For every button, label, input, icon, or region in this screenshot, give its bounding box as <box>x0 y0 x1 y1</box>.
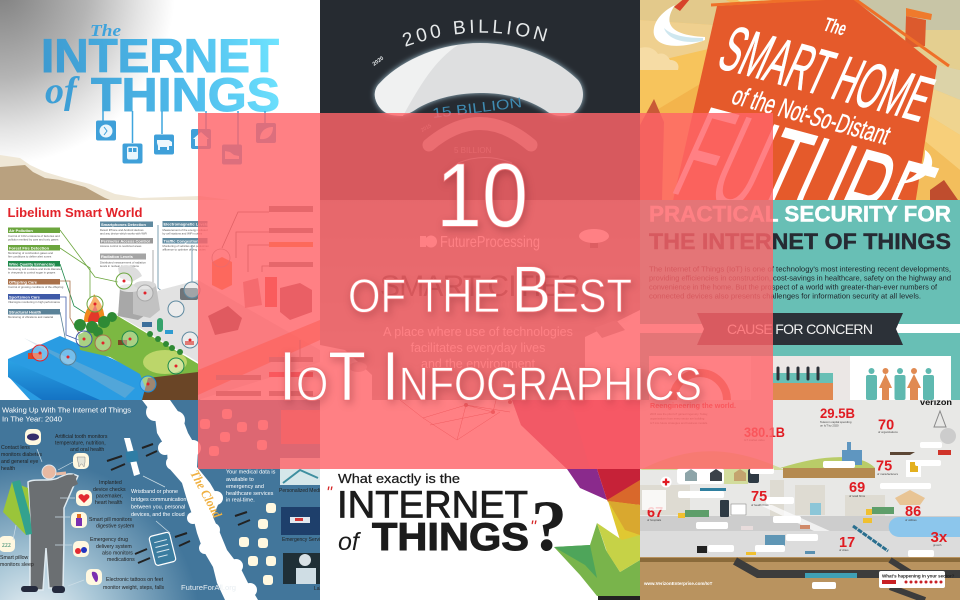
heading: Reengineering the world: Reengineering the world. <box>650 403 736 410</box>
labels: body sensors: Artificial tooth monitors <box>55 434 108 440</box>
labels: body sensors: and oral health <box>70 447 104 453</box>
brown soil edge <box>142 372 198 400</box>
large glowing arc <box>375 43 583 116</box>
icon: smart pill <box>71 512 87 528</box>
callout: what's happening in your sector <box>879 571 955 588</box>
heading: The Internet of Things <box>44 24 279 112</box>
heading: Reengineering the world: IoT into future strategies and business models. <box>650 421 708 425</box>
panel: What exactly is the Internet of Things <box>320 400 640 600</box>
icon: train <box>122 144 142 164</box>
labels: body sensors: also monitors <box>102 550 133 556</box>
hospital building <box>642 490 666 510</box>
sensor labels: left column <box>8 228 64 319</box>
label: bridge text: between you, personal <box>131 504 185 510</box>
sensor labels: left column: Offspring Care <box>9 280 38 284</box>
labels: body sensors <box>0 434 165 591</box>
sensor labels: centre columns: Electromagnetic Levels <box>164 222 209 226</box>
icon: drug delivery <box>73 541 89 557</box>
banner: Cause for Concern <box>697 313 903 345</box>
labels: body sensors: Smart pillow <box>0 555 29 561</box>
heading: The Internet of Things: The <box>90 21 122 40</box>
neighbourhood strip <box>677 468 759 484</box>
icon: eye <box>25 429 41 445</box>
caption: lab: Lab <box>314 586 323 592</box>
labels: body sensors: digestive system <box>96 524 134 530</box>
city section: connector lines <box>222 212 300 357</box>
torn paper and sand <box>0 155 198 200</box>
heading: The Internet of Things: THE INTERNET OF THINGS <box>649 229 951 254</box>
low poly head: upper <box>512 400 640 505</box>
sensor labels: left column: fire conditions to define alert zones <box>8 254 52 258</box>
label: 5 billion: 5 BILLION <box>454 146 492 155</box>
cloud <box>640 47 679 70</box>
main title <box>279 146 702 415</box>
grey road plate <box>116 280 320 400</box>
city section: orange tower <box>212 249 232 290</box>
labels: body sensors: delivery system <box>96 544 132 550</box>
heading: Reengineering the world <box>650 403 736 425</box>
stat captions: Telecom capital spending <box>820 420 852 424</box>
sensor labels: left column: Forest Fire Detection <box>9 246 50 250</box>
translucent red overlay panel <box>198 113 773 469</box>
label: FutureForAll.org: FutureForAll.org <box>181 585 236 592</box>
icon: leaf <box>256 123 276 143</box>
labels: body sensors: pacemaker, <box>96 494 123 500</box>
red stat numbers: 3x <box>930 529 948 546</box>
sensor labels: left column: Structural Health <box>9 310 42 314</box>
sensor labels: left column: Monitoring of vibrations and material <box>8 315 53 319</box>
icon: red cross <box>660 476 672 488</box>
arrows: data flow <box>107 444 250 563</box>
landscape: green hills <box>640 451 875 470</box>
low poly head: green <box>554 523 640 600</box>
quote mark: open: " <box>326 483 333 502</box>
arc label: 15 Billion: 15 BILLION <box>431 94 523 121</box>
label: 2015: 2015 <box>420 123 433 134</box>
man in pajamas <box>21 465 78 593</box>
isometric water block <box>8 336 200 400</box>
stat captions: of cities <box>839 548 849 552</box>
golf green <box>143 350 187 374</box>
photo: lab <box>283 553 320 584</box>
heading: The: The <box>820 14 850 40</box>
stat captions: of utilities <box>905 518 917 522</box>
sensor labels: left column: pollution emitted by cars and toxic gases <box>8 238 59 242</box>
sensor labels: centre columns: Access control to restricted areas <box>100 244 142 248</box>
lower road <box>640 531 960 557</box>
city section: road deck <box>198 320 320 395</box>
panel: 200 billion devices dark poster <box>320 0 640 200</box>
stat captions: of retail firms <box>849 494 866 498</box>
landscape: brown field <box>783 468 875 478</box>
photo: emergency services <box>281 507 320 535</box>
banner: Cause for Concern: CAUSE FOR CONCERN <box>727 321 873 337</box>
stat card: donut <box>649 356 751 427</box>
stat card: calendar <box>751 356 850 400</box>
red stat numbers: 29.5B <box>820 405 855 421</box>
sensor labels: centre columns: affluence to optimize driving routes <box>162 248 206 252</box>
sensor labels: centre columns: Monitoring of vehicles and pedestrian <box>162 244 209 248</box>
photo: personalized medicine <box>280 410 320 485</box>
intro paragraph <box>649 266 951 300</box>
hanging icon strings <box>103 111 265 145</box>
red stat numbers: 75 <box>751 489 767 505</box>
icon: sleep: zzz <box>2 543 11 549</box>
panel: Practical Security for IoT <box>640 200 960 427</box>
arc path for labels <box>405 33 552 47</box>
labels: body sensors: temperature, nutrition, <box>55 440 106 446</box>
text: of: of <box>338 528 362 556</box>
heading: Waking Up: Waking Up With The Internet of Things <box>2 406 131 414</box>
red stat numbers: 67 <box>647 505 663 521</box>
city section: buildings <box>208 277 312 335</box>
sensor labels: left column: in vineyards to control sugar in grapes <box>8 270 56 274</box>
description <box>383 325 573 371</box>
labels: body sensors: Contact lens <box>1 445 30 451</box>
text: What exactly is the: What exactly is the <box>338 471 460 486</box>
isometric building: left <box>320 345 372 400</box>
white band <box>640 324 960 333</box>
label: 200 Billion: 200 BILLION <box>402 20 548 47</box>
water pool <box>889 517 960 537</box>
sensor labels: centre columns: by cell stations and WiFi routers <box>162 232 203 236</box>
red stat numbers <box>647 405 948 551</box>
icon: house <box>191 129 211 149</box>
heading: Libelium Smart World: Libelium Smart World <box>8 205 143 220</box>
labels: body sensors: health <box>1 466 15 472</box>
callout: what's happening in your sector: What's happening in your sector? <box>882 574 955 578</box>
icon: cow <box>154 134 174 154</box>
heading: Smart Cities: SMART CITIES <box>380 270 580 303</box>
chimney <box>905 8 932 48</box>
labels: body sensors: monitors diabetes <box>1 452 42 458</box>
question mark: ? <box>531 486 567 566</box>
sensor labels: centre columns: levels in nuclear power stations <box>100 264 139 268</box>
label: cloud description: in real-time. <box>226 498 255 504</box>
sensor labels: centre columns <box>100 221 209 268</box>
label: bridge text: bridges communication <box>131 497 186 503</box>
soil top band <box>640 558 960 562</box>
red stat numbers: 69 <box>849 480 865 496</box>
vehicles <box>28 288 198 359</box>
stat captions <box>647 420 942 552</box>
heading: Practical Security: PRACTICAL SECURITY FOR <box>649 202 951 226</box>
panel: The Internet of Things poster <box>0 0 279 200</box>
label: cloud description: emergency and <box>226 484 264 490</box>
cooling towers <box>118 265 160 320</box>
isometric green land <box>78 315 200 400</box>
middle arc <box>429 124 531 145</box>
low poly head: yellow <box>608 501 640 560</box>
background rays <box>640 0 960 170</box>
heading: The Internet of Things: of <box>45 70 80 112</box>
trees <box>74 312 183 355</box>
tunnel train <box>805 573 857 578</box>
sensor labels: centre columns: Perimeter Access Control <box>101 238 150 244</box>
text: Things: THINGS <box>372 516 529 559</box>
icon: electronic tattoo <box>86 569 102 585</box>
mini icons near cloud <box>239 503 276 585</box>
sensor labels: centre columns: Radiation Levels <box>101 254 134 259</box>
caption: personalized medicine: Personalized Medic <box>279 488 323 494</box>
caption: emergency services: Emergency Service <box>282 537 326 543</box>
labels: body sensors: Emergency drug <box>90 537 128 543</box>
description: A place where use of technologies <box>383 325 573 339</box>
sensor labels: centre columns: Traffic Congestion <box>164 238 199 244</box>
sensor labels: left column: Sportsmen Care <box>9 294 41 300</box>
red stat numbers: 70 <box>878 418 894 434</box>
logo: Future Processing <box>420 234 540 251</box>
labels: body sensors: Implanted <box>99 480 122 486</box>
sensor labels: left column: Monitoring soil moisture and trunk diameter <box>8 267 62 271</box>
red stat numbers: 75 <box>876 458 892 474</box>
label: 2020: 2020 <box>372 56 385 68</box>
description: facilitates everyday lives <box>411 341 545 355</box>
panel: Smart Home poster <box>640 0 960 200</box>
labels: body sensors: monitor weight, steps, falls <box>103 585 165 591</box>
label: cloud description: healthcare services <box>226 491 274 497</box>
heading: The Internet of Things: INTERNET <box>41 29 279 82</box>
footer URL: www.VerizonEnterprise.com/IoT <box>643 581 713 586</box>
icon: sleep <box>0 536 15 552</box>
sensor labels: left column: Control of growing conditions of the offspring <box>8 285 64 289</box>
label: bridge text: devices, and the cloud <box>131 512 185 518</box>
panel: Libelium Smart World <box>0 200 320 400</box>
sensor labels: left column: Monitoring of combustion gases and <box>8 251 53 255</box>
icon: shoe <box>222 144 242 164</box>
callout pills <box>678 442 942 589</box>
heading: Reengineering the world: 2015 was the pilot IoT gained ingenuity. Today, <box>650 412 708 416</box>
label: cloud description: Your medical data is <box>226 470 276 476</box>
rooftop arrow right <box>930 180 958 200</box>
stat captions: growth <box>933 543 942 547</box>
network nodes <box>464 400 512 414</box>
text: Internet: INTERNET <box>337 484 528 526</box>
pillow <box>3 480 32 535</box>
trains and trucks <box>678 488 894 555</box>
red stat numbers: 86 <box>905 504 921 520</box>
underground soil <box>640 557 960 600</box>
intro paragraph: convenience in the home. But the prospect of a world with greater-than-ever numbers of <box>649 284 937 292</box>
icon: heart <box>76 490 92 506</box>
stat captions: of manufacturers <box>877 472 899 476</box>
stat captions: IoT market value <box>744 438 765 442</box>
sensor labels: centre columns: Smartphones Detection <box>101 222 146 227</box>
icon: tooth <box>73 453 89 469</box>
house roof line <box>711 0 949 66</box>
sensor labels: left column: Vital signs monitoring in high performance <box>8 300 60 304</box>
the cloud band <box>142 400 258 600</box>
sensor circles <box>32 273 200 392</box>
logo: verizon: verizon <box>920 398 952 407</box>
red stat numbers: 17 <box>839 535 855 551</box>
small swoosh <box>897 150 932 184</box>
rooftop arrows <box>640 99 664 200</box>
leader lines <box>13 449 170 586</box>
stat captions: on IoT by 2020 <box>820 424 839 428</box>
labels: body sensors: and general eye <box>1 459 38 465</box>
mini icons under overlay <box>200 409 268 456</box>
label: cloud description <box>226 470 276 504</box>
intro paragraph: The Internet of Things (IoT) is one of technology's most interesting recent developments, <box>649 266 951 274</box>
labels: body sensors: device checks <box>93 487 126 493</box>
panel: Waking Up With IoT <box>0 400 326 600</box>
labels: body sensors: Electronic tattoos on feet <box>106 577 164 583</box>
labels: body sensors: heart health <box>95 500 123 506</box>
diagonal rail train <box>853 526 888 551</box>
logo: Future Processing: FutureProcessing <box>440 234 540 251</box>
fire <box>84 294 105 322</box>
sensor labels: left column: Wine Quality Enhancing <box>9 262 55 266</box>
icon: wristband <box>124 438 140 476</box>
isometric building: right <box>585 310 640 400</box>
labels: body sensors: monitors sleep <box>0 562 34 568</box>
panel: Verizon IoT map <box>640 398 960 600</box>
tunnels <box>735 560 960 600</box>
house wall <box>672 0 937 205</box>
small arc <box>458 158 512 163</box>
sensor labels: centre columns: Measurement of the energy radiated <box>162 228 208 232</box>
heading: The Internet of Things: THINGS <box>91 68 280 121</box>
rocket swoosh <box>654 0 705 46</box>
heading: Waking Up: In The Year: 2040 <box>2 414 62 424</box>
stat captions: of hospitals <box>647 518 662 522</box>
labels: body sensors: Smart pill monitors <box>89 517 132 523</box>
sensor labels: centre columns: and any device which works with WiFi <box>100 232 147 236</box>
facilities <box>697 411 956 553</box>
icon: sensor disc <box>579 229 609 248</box>
quote mark: close: " <box>530 517 537 536</box>
label: bridge text: Wristband or phone <box>131 489 178 495</box>
sensor dots <box>38 280 192 386</box>
labels: body sensors: medications <box>107 557 135 563</box>
network lines <box>400 400 510 440</box>
intro paragraph: connected devices also presents challenges for information security at all levels. <box>649 294 921 300</box>
city buildings background <box>640 480 940 558</box>
stat captions: of health firms <box>751 503 769 507</box>
label: cloud description: available to <box>226 477 254 483</box>
sensor labels: centre columns: Distributed measurement of radiation <box>100 260 146 264</box>
title line: IoT Infographics: IOT INFOGRAPHICS <box>279 337 702 415</box>
label: The Cloud: The Cloud <box>187 467 225 521</box>
panel: Smart Cities <box>320 200 640 400</box>
sensor labels: left column: Air Pollution <box>9 228 33 233</box>
description: and the environment <box>421 357 536 371</box>
intro paragraph: providing efficiencies in construction, cost-savings in healthcare, safety on the highway and <box>649 276 951 282</box>
sensor labels: left column: Control of CO2 emissions of factories and <box>8 234 60 238</box>
stat captions: of organizations <box>878 430 898 434</box>
icon: phone <box>149 532 176 566</box>
title line: 10: 10 <box>436 146 528 246</box>
heading: Waking Up <box>2 406 131 424</box>
main roads <box>640 505 960 558</box>
stat card: people <box>850 356 951 400</box>
heading: Reengineering the world: organizations from every sector are building <box>650 416 705 420</box>
label: bridge text <box>131 489 186 518</box>
corner vignette <box>0 0 164 154</box>
icon: alarm clock <box>96 120 116 140</box>
city section: label boxes <box>216 206 313 396</box>
sensor labels: centre columns: Detect iPhone and Android devices <box>100 228 144 232</box>
red stat numbers: 380.1B <box>744 424 785 440</box>
sensor connector lines <box>60 225 200 400</box>
title line: of the Best: OF THE BEST <box>348 252 632 326</box>
